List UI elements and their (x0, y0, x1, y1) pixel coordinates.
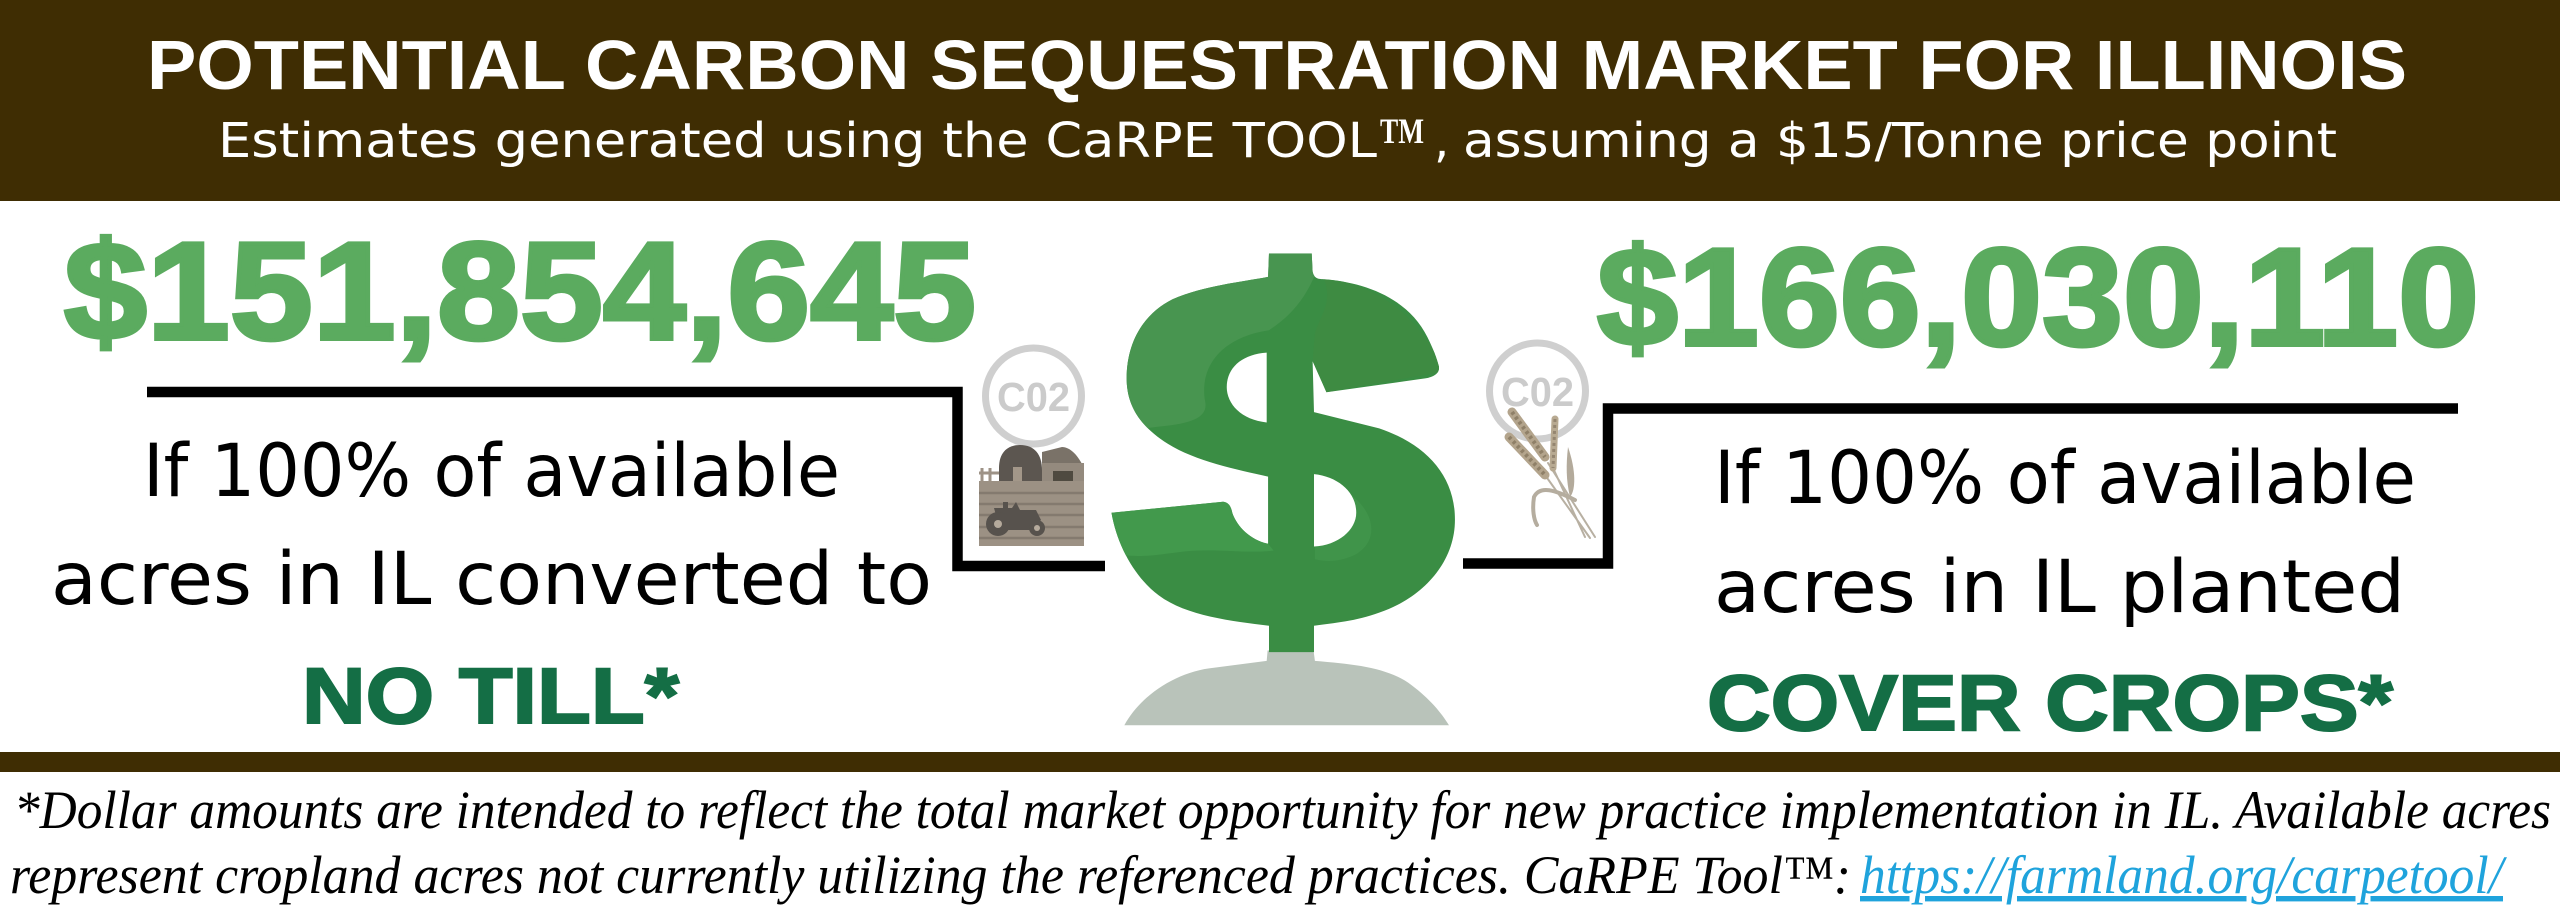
footnote (10, 780, 2551, 905)
bottom divider band (0, 752, 2560, 772)
subtitle: Estimates generated using the CaRPE TOOL (218, 113, 1377, 169)
icon: right CO2 bubble (1490, 343, 1586, 439)
left practice label: NO TILL* (302, 651, 679, 740)
icon: left CO2 bubble (986, 348, 1082, 444)
right description (1714, 436, 2416, 630)
mound (1124, 650, 1449, 725)
right description: acres in IL planted (1714, 545, 2405, 630)
footnote link: https://farmland.org/carpetool/ (1860, 845, 2508, 905)
subtitle: TM (1380, 111, 1424, 151)
right connector line (1463, 408, 2458, 564)
header band (0, 0, 2560, 201)
icon: wheat stalks (1509, 412, 1595, 538)
dollar sign (1104, 248, 1471, 657)
left connector line (147, 392, 1105, 566)
icon: barn and tractor field (979, 445, 1084, 546)
left description (51, 429, 932, 622)
subtitle (218, 111, 2337, 169)
left description: acres in IL converted to (51, 537, 932, 622)
subtitle: assuming a $15/Tonne price point (1463, 113, 2337, 169)
left dollar figure: $151,854,645 (64, 214, 976, 369)
left description: If 100% of available (143, 429, 840, 514)
right description: If 100% of available (1714, 436, 2416, 521)
footnote: represent cropland acres not currently utilizing the referenced practices. CaRPE Tool™: (10, 845, 1851, 905)
right dollar figure: $166,030,110 (1597, 220, 2479, 375)
title: POTENTIAL CARBON SEQUESTRATION MARKET FOR ILLINOIS (147, 26, 2407, 104)
icon: green dollar sign on mound (1104, 248, 1471, 725)
right practice label: COVER CROPS* (1707, 658, 2393, 747)
icon: left CO2 bubble: C02 (997, 374, 1070, 420)
subtitle: , (1434, 113, 1449, 169)
icon: right CO2 bubble: C02 (1501, 369, 1574, 415)
